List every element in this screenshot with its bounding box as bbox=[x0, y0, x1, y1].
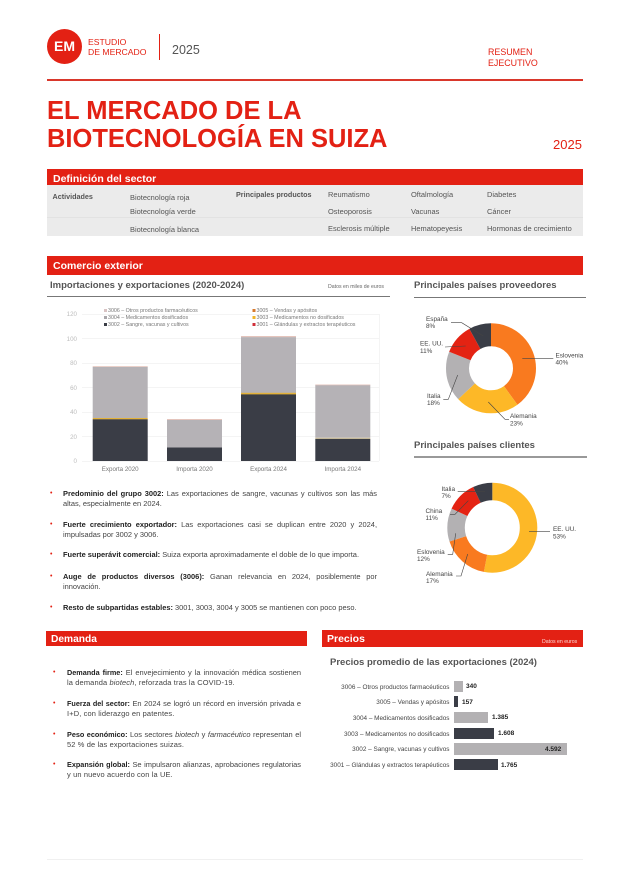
activity: Biotecnología roja bbox=[130, 193, 190, 202]
donut chart: clients: 53% bbox=[553, 534, 566, 540]
row: 3002: 3002 – Sangre, vacunas y cultivos bbox=[352, 746, 450, 753]
product: Osteoporosis bbox=[328, 207, 372, 216]
donut chart: suppliers: 18% bbox=[427, 400, 440, 407]
executive summary label: RESUMEN bbox=[488, 46, 532, 56]
donut chart: clients: Alemania bbox=[426, 571, 453, 578]
row: 3006: 340 bbox=[466, 683, 477, 690]
bullet: export growth: Fuerte crecimiento exportador: Las exportaciones casi se duplican entre 2020 y 2024, impulsadas por 3002 y 3006. bbox=[63, 520, 377, 539]
bullet: sector strength: Fuerza del sector: En 2024 se logró un récord en inversión privada e bbox=[67, 699, 301, 708]
subheading: supplier countries: Principales países proveedores bbox=[414, 280, 557, 291]
heading: demand bbox=[46, 631, 307, 646]
chart legend: 3005 – Vendas y apósitos bbox=[256, 308, 318, 314]
activity: Biotecnología blanca bbox=[130, 225, 199, 234]
stacked bar chart: 80 bbox=[70, 360, 78, 367]
row: 3001: 3001 – Glándulas y extractos terapéuticos bbox=[330, 762, 450, 769]
bar: imports 2020 bbox=[167, 419, 222, 461]
bullet: group 3002: Predominio del grupo 3002: Las exportaciones de sangre, vacunas y cultivos son las más altas, especialmente en 2024. bbox=[63, 488, 377, 508]
row: 3004 bbox=[353, 712, 508, 723]
stacked bar chart: Importa 2020 bbox=[176, 466, 213, 473]
activity: Biotecnología verde bbox=[130, 207, 196, 216]
footer rule bbox=[47, 859, 583, 860]
title: BIOTECNOLOGÍA EN SUIZA bbox=[47, 125, 387, 153]
bullet: economic weight: Peso económico: Los sectores biotech y farmacéutico representan el bbox=[67, 730, 301, 739]
heading: demand: Demanda bbox=[51, 634, 97, 645]
stacked bar chart: 40 bbox=[70, 409, 78, 416]
donut chart: suppliers: 8% bbox=[426, 323, 436, 330]
logo circle bbox=[47, 29, 82, 64]
header rule bbox=[47, 79, 583, 81]
bullet: firm demand: Demanda firme: El envejecimiento y la innovación médica sostienen bbox=[67, 668, 301, 677]
chart legend bbox=[104, 308, 356, 328]
supplier rule bbox=[414, 297, 586, 298]
row divider bbox=[47, 217, 583, 218]
row: 3003 bbox=[344, 728, 514, 739]
stacked bar chart: Exporta 2020 bbox=[102, 466, 139, 473]
stacked bar chart: Importa 2024 bbox=[325, 466, 362, 473]
product: Vacunas bbox=[411, 207, 439, 216]
product: Oftalmología bbox=[411, 190, 453, 199]
donut chart: suppliers: EE. UU. bbox=[420, 340, 443, 348]
heading: prices: Precios bbox=[327, 633, 365, 645]
row: 3006 bbox=[341, 681, 477, 692]
price bar chart bbox=[330, 681, 567, 770]
stacked bar chart: 100 bbox=[67, 336, 78, 343]
donut chart: suppliers: 23% bbox=[510, 420, 523, 428]
stacked bar chart: 0 bbox=[74, 458, 78, 465]
donut chart: clients: 17% bbox=[426, 578, 439, 585]
heading: foreign trade bbox=[47, 256, 583, 275]
panel: sector definition bbox=[47, 169, 583, 236]
row: 3001 bbox=[330, 759, 518, 770]
row: 3004: 1.385 bbox=[492, 714, 508, 721]
heading: sector definition bbox=[47, 169, 583, 185]
product: Reumatismo bbox=[328, 190, 370, 199]
bullet: sector strength: I+D, con liderazgo en patentes. bbox=[67, 708, 174, 718]
donut chart: clients: Eslovenia bbox=[417, 549, 445, 556]
donut chart: clients: 11% bbox=[426, 515, 438, 522]
executive summary label: EJECUTIVO bbox=[488, 58, 538, 68]
heading: foreign trade: Comercio exterior bbox=[53, 260, 143, 272]
products label: Principales productos bbox=[236, 190, 312, 199]
row: 3003: 3003 – Medicamentos no dosificados bbox=[344, 731, 450, 738]
bullet: firm demand bbox=[67, 668, 301, 687]
subheading: client countries: Principales países clientes bbox=[414, 440, 535, 451]
price unit note: Datos en euros bbox=[542, 639, 577, 645]
row: 3006: 3006 – Otros productos farmacéuticos bbox=[341, 684, 450, 691]
title: EL MERCADO DE LA bbox=[47, 97, 302, 125]
donut chart: clients: China bbox=[426, 508, 443, 515]
donut chart: clients: Italia bbox=[442, 486, 455, 493]
stacked bar chart: 120 bbox=[67, 311, 78, 318]
stacked bar chart: 20 bbox=[70, 434, 78, 441]
chart legend: 3003 – Medicamentos no dosificados bbox=[256, 315, 344, 321]
chart legend: 3001 – Glándulas y extractos terapéuticos bbox=[256, 322, 356, 328]
client rule bbox=[414, 456, 587, 458]
bullet: economic weight bbox=[67, 730, 301, 749]
donut chart: clients: EE. UU. bbox=[553, 526, 576, 533]
row: 3002 bbox=[352, 743, 567, 755]
donut chart: suppliers: Italia bbox=[427, 393, 441, 400]
row: 3003: 1.608 bbox=[498, 730, 514, 737]
bar: exports 2024 bbox=[241, 336, 296, 461]
title year: 2025 bbox=[553, 137, 582, 152]
title bbox=[47, 97, 387, 153]
logo text: DE MERCADO bbox=[88, 47, 146, 57]
chart legend: 3004 – Medicamentos dosificados bbox=[108, 315, 188, 321]
stacked bar chart: Exporta 2024 bbox=[250, 466, 287, 473]
product: Hematopeyesis bbox=[411, 224, 462, 233]
bullet: economic weight: 52 % de las exportaciones suizas. bbox=[67, 740, 184, 748]
product: Diabetes bbox=[487, 190, 516, 199]
subheading: imports and exports: Importaciones y exportaciones (2020-2024) bbox=[50, 280, 244, 291]
bullet: firm demand: la demanda biotech, reforzada tras la COVID-19. bbox=[67, 678, 235, 686]
bullet: global expansion: y un nuevo acuerdo con la UE. bbox=[67, 770, 173, 778]
bullet: trade surplus: Fuerte superávit comercial: Suiza exporta aproximadamente el doble de lo que importa. bbox=[63, 550, 359, 559]
row: 3005: 157 bbox=[462, 699, 473, 706]
heading: prices bbox=[322, 630, 583, 647]
executive summary label bbox=[488, 46, 538, 68]
row: 3005 bbox=[376, 696, 473, 707]
logo text: ESTUDIO bbox=[88, 37, 126, 47]
logo circle: EM bbox=[54, 38, 75, 54]
chart legend: 3002 – Sangre, vacunas y cultivos bbox=[108, 322, 189, 328]
row: 3004: 3004 – Medicamentos dosificados bbox=[353, 715, 450, 722]
bullet: sector strength bbox=[67, 699, 301, 718]
row: 3001: 1.765 bbox=[501, 762, 517, 769]
donut chart: suppliers: 40% bbox=[556, 360, 569, 366]
logo text bbox=[88, 37, 146, 57]
data unit note: Datos en miles de euros bbox=[328, 284, 384, 290]
donut chart: clients: 12% bbox=[417, 556, 430, 563]
donut chart: suppliers: Alemania bbox=[510, 413, 537, 420]
row: 3002: 4.592 bbox=[545, 746, 561, 753]
product: Esclerosis múltiple bbox=[328, 224, 390, 233]
bar: imports 2024 bbox=[315, 384, 370, 461]
activities label: Actividades bbox=[52, 192, 93, 201]
bullet: diverse products: Auge de productos diversos (3006): Ganan relevancia en 2024, posiblemente por innovación. bbox=[63, 572, 377, 591]
donut chart: suppliers: Eslovenia bbox=[556, 352, 584, 360]
chart legend: 3006 – Otros productos farmacéuticos bbox=[108, 308, 198, 314]
donut chart: clients: 7% bbox=[442, 493, 451, 500]
donut chart: suppliers: España bbox=[426, 316, 448, 323]
subheading rule bbox=[47, 296, 390, 297]
stacked bar chart: 60 bbox=[70, 385, 78, 392]
product: Cáncer bbox=[487, 207, 511, 216]
bullet: stable subheadings: Resto de subpartidas estables: 3001, 3003, 3004 y 3005 se mantienen con poco peso. bbox=[63, 602, 357, 612]
heading: sector definition: Definición del sector bbox=[53, 173, 156, 185]
bullet: global expansion: Expansión global: Se impulsaron alianzas, aprobaciones regulatorias bbox=[67, 760, 301, 769]
header year: 2025 bbox=[172, 43, 200, 57]
bullet: global expansion bbox=[67, 760, 301, 779]
subheading: average export prices: Precios promedio de las exportaciones (2024) bbox=[330, 657, 537, 668]
row: 3005: 3005 – Vendas y apósitos bbox=[376, 699, 450, 706]
bar: exports 2020 bbox=[93, 366, 148, 461]
product: Hormonas de crecimiento bbox=[487, 224, 572, 233]
header divider bbox=[159, 34, 160, 60]
donut chart: suppliers: 11% bbox=[420, 348, 433, 355]
